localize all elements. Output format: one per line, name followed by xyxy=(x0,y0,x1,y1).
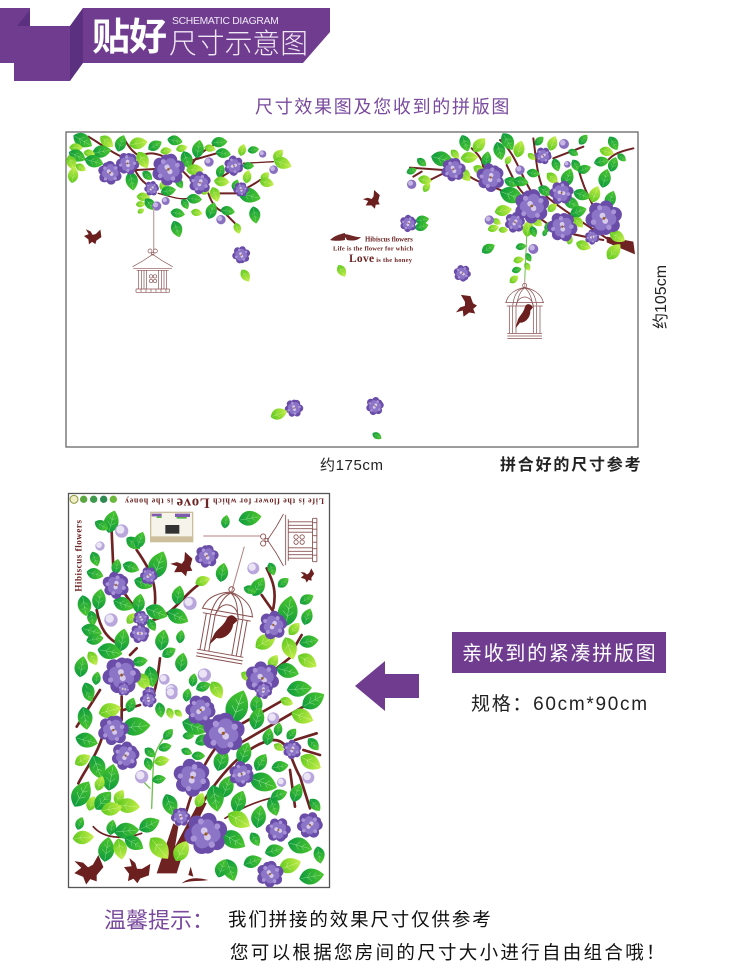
tip line 1: 我们拼接的效果尺寸仅供参考 xyxy=(228,909,493,930)
tip block xyxy=(104,908,667,963)
callout: compact layout: 亲收到的紧凑拼版图 xyxy=(462,642,657,665)
banner ribbon shape xyxy=(0,8,330,81)
thumbnail xyxy=(150,512,193,542)
arrow pointing left xyxy=(355,661,419,711)
heading: 贴好: 贴好 xyxy=(92,17,166,59)
panel: assembled wall sticker xyxy=(64,129,638,447)
motto: Hibiscus flowers: Hibiscus flowers xyxy=(365,236,413,244)
string and cages xyxy=(193,514,317,664)
scattered flowers and leaves xyxy=(269,396,385,441)
callout: compact layout xyxy=(452,632,666,673)
section title: 尺寸效果图及您收到的拼版图 xyxy=(255,97,511,117)
heading: SCHEMATIC DIAGRAM: SCHEMATIC DIAGRAM xyxy=(172,16,279,27)
dimension: height: 约105cm xyxy=(652,265,670,329)
sheet frame xyxy=(68,494,330,888)
badges xyxy=(70,495,117,503)
tip label: 温馨提示： xyxy=(104,908,214,933)
tip line 2: 您可以根据您房间的尺寸大小进行自由组合哦！ xyxy=(230,942,667,963)
panel: compact layout sheet xyxy=(66,494,329,889)
sticker motto xyxy=(330,233,413,265)
small perched birds xyxy=(330,233,361,241)
heading: 尺寸示意图: 尺寸示意图 xyxy=(169,28,308,59)
motto: Life is the flower for which: Life is the flower for which xyxy=(333,246,413,252)
inverted motto: Life is the flower for which Love is the honey xyxy=(125,494,324,510)
vertical brand text: Hibiscus flowers xyxy=(74,519,84,592)
header banner xyxy=(0,8,330,81)
sheet lower part xyxy=(66,678,328,889)
sheet upper part xyxy=(70,494,324,703)
caption: assembled size reference: 拼合好的尺寸参考 xyxy=(500,455,642,474)
spec text: 规格：60cm*90cm xyxy=(471,693,649,715)
dimension: width: 约175cm xyxy=(320,457,384,474)
motto: Love is the honey: Love is the honey xyxy=(349,253,413,265)
left hanging branch xyxy=(64,129,349,292)
panel frame xyxy=(66,132,638,447)
right hanging branch xyxy=(335,130,635,338)
